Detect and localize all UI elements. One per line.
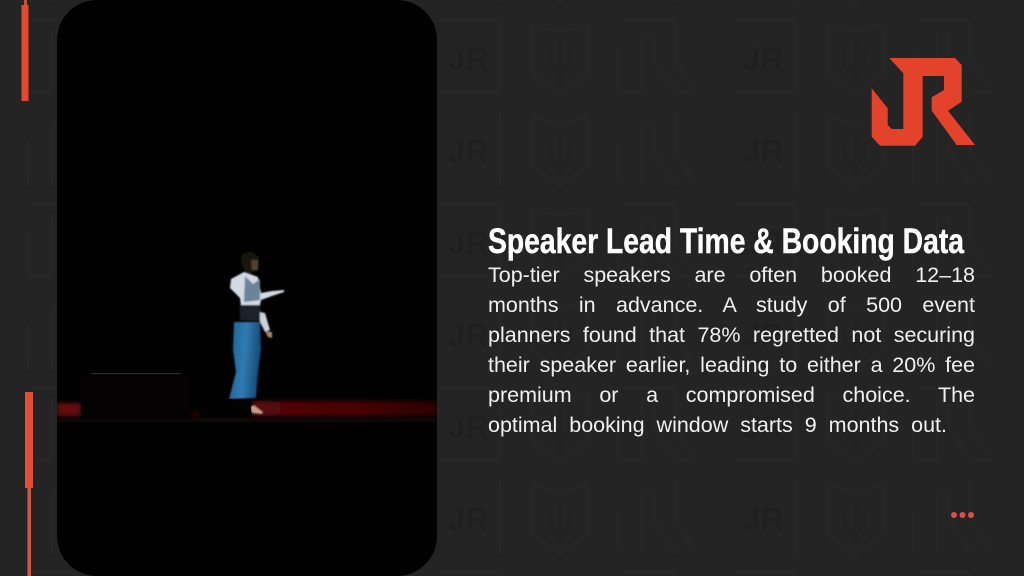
body text: their speaker earlier, leading to either a 20% fee bbox=[488, 353, 975, 377]
stage floor: red light band bbox=[57, 401, 437, 417]
body text: premium or a compromised choice. The bbox=[488, 383, 975, 407]
photo: speaker on a dark stage bbox=[57, 0, 437, 576]
top-left accent bar bbox=[22, 0, 28, 101]
speaker figure bbox=[229, 252, 284, 414]
bottom-left accent bar bbox=[25, 392, 33, 576]
body text bbox=[488, 263, 975, 437]
stage monitor box bbox=[81, 373, 189, 419]
body text: planners found that 78% regretted not securing bbox=[488, 323, 975, 347]
three dots bbox=[951, 512, 974, 518]
body text: optimal booking window starts 9 months out. bbox=[488, 413, 947, 437]
body text: Top-tier speakers are often booked 12–18 bbox=[488, 263, 975, 287]
body text: months in advance. A study of 500 event bbox=[488, 293, 975, 317]
